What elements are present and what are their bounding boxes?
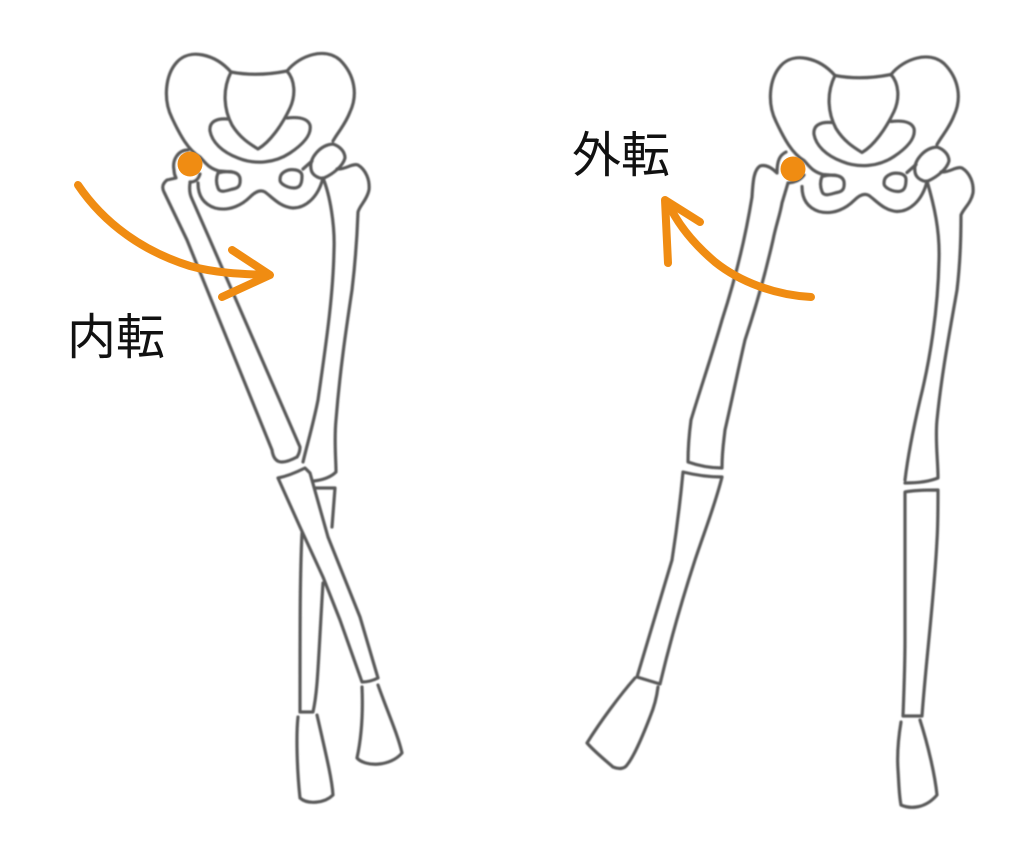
figure: abduction skeleton	[587, 57, 973, 807]
left foot	[587, 678, 658, 768]
right femur	[905, 147, 973, 483]
pelvis	[770, 57, 958, 213]
front foot	[357, 685, 402, 764]
left femur	[688, 152, 804, 468]
left femur	[163, 150, 300, 462]
arrow: abduction	[665, 200, 811, 297]
figure: adduction skeleton	[163, 54, 402, 802]
pelvis	[166, 54, 354, 209]
hip joint marker: adduction	[178, 152, 202, 176]
arrow: adduction	[78, 185, 270, 297]
right foot	[898, 720, 937, 807]
left tibia	[637, 472, 722, 684]
hidden tibia	[300, 488, 335, 712]
hip joint marker: abduction	[780, 156, 806, 182]
front tibia	[278, 468, 378, 682]
label: abduction: 外転	[572, 129, 670, 183]
right tibia	[903, 490, 938, 716]
label: adduction: 内転	[67, 311, 165, 365]
right femur	[303, 144, 369, 481]
hidden foot	[297, 715, 333, 802]
